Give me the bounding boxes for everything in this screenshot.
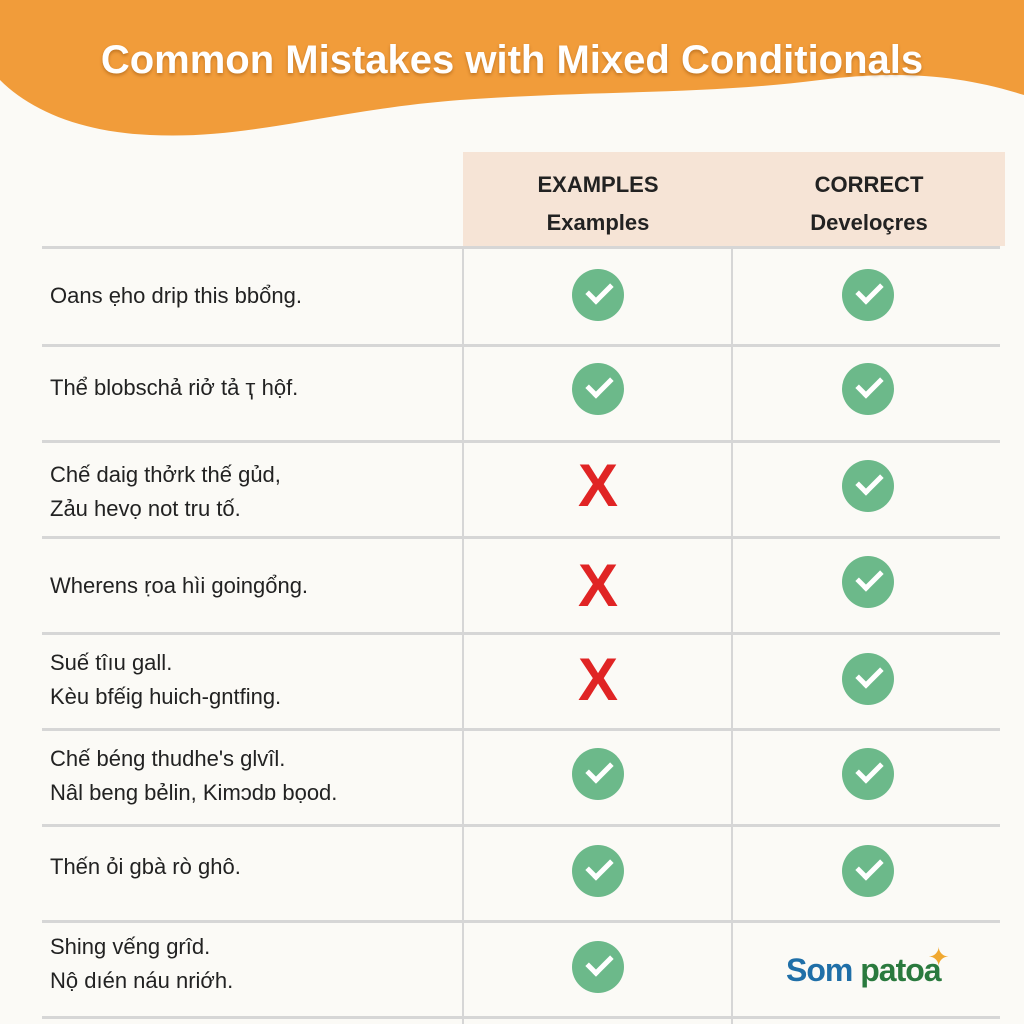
row 8: Nộ dıén náu nriớh. (50, 968, 233, 993)
row 7: Thến ỏi gbà rò ghô. (50, 854, 241, 879)
row 8 (50, 934, 624, 993)
row 1: Oans ẹho drip this bbổng. (50, 283, 302, 308)
row 3 (50, 452, 894, 521)
column header panel: CORRECT (815, 172, 923, 197)
column header panel: Examples (547, 210, 649, 235)
row 5: Suế tîıu gall. (50, 650, 172, 675)
column header panel: Develoçres (810, 210, 928, 235)
row 4 (50, 552, 894, 619)
row 7 (50, 845, 894, 897)
row 3: Zảu hevọ not tru tố. (50, 496, 241, 521)
row 6: Chế béng thudhe's glvîl. (50, 746, 285, 771)
row 6 (50, 746, 894, 805)
row 5 (50, 646, 894, 713)
row 5: Kèu bfếig huich-gntfing. (50, 684, 281, 709)
row 2: Thể blobschả riở tả ҭ hộf. (50, 375, 298, 400)
column header panel: EXAMPLES (537, 172, 659, 197)
row 4: X (578, 552, 618, 619)
row 8: Shing vếng grîd. (50, 934, 210, 959)
row 3: X (578, 452, 618, 519)
row 5: X (578, 646, 618, 713)
row 1 (50, 269, 894, 321)
header banner (0, 0, 1024, 136)
row 4: Wherens ṛoa hìi goingổng. (50, 573, 308, 598)
logo: ✦ (928, 942, 949, 972)
row 2 (50, 363, 894, 415)
logo: Som patoa (786, 952, 941, 988)
column header panel (463, 152, 1005, 246)
row 6: Nâl beng bẻlin, Kimɔdɒ bọod. (50, 780, 337, 805)
row 3: Chế daig thởrk thế gủd, (50, 462, 281, 487)
title: Common Mistakes with Mixed Conditionals (101, 38, 923, 82)
